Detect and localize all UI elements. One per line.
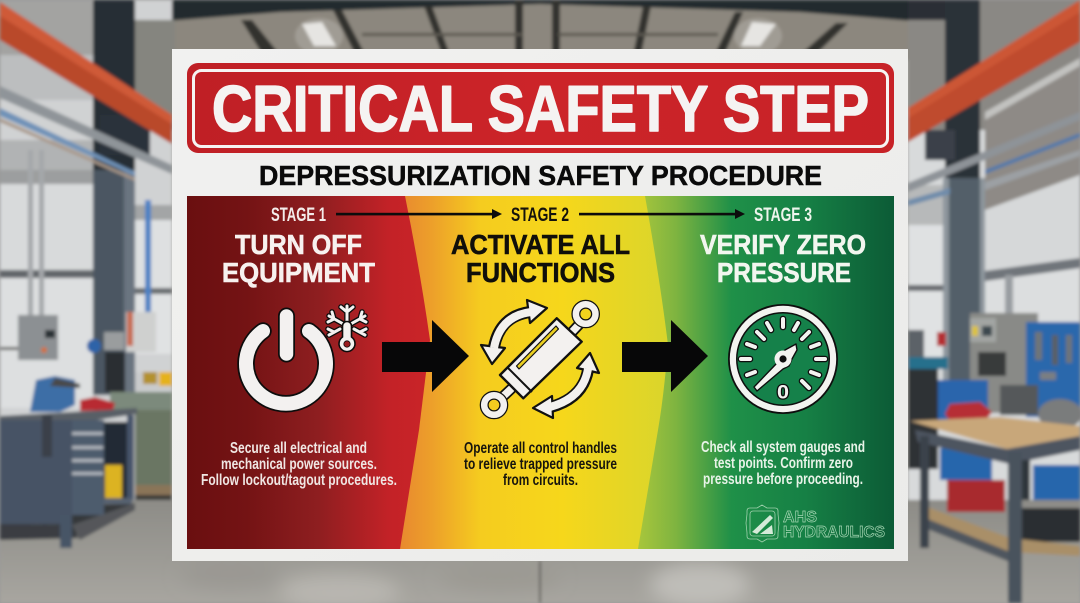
stage 2 description: Operate all control handles bbox=[464, 440, 617, 457]
right equipment bbox=[908, 313, 1080, 469]
panel: stage bands bbox=[187, 196, 894, 549]
stage 3 description: Check all system gauges and bbox=[701, 439, 865, 456]
stage 3 heading: VERIFY ZERO bbox=[700, 229, 866, 260]
left equipment bbox=[0, 312, 172, 500]
right beam bbox=[908, 0, 1080, 142]
stage 1 heading: EQUIPMENT bbox=[222, 257, 375, 288]
arrow: large black arrow 2 bbox=[622, 320, 708, 392]
floor bbox=[0, 500, 1080, 603]
left pipes bbox=[0, 86, 172, 312]
stage 1 description: Secure all electrical and bbox=[230, 440, 367, 457]
panel: stage 1 bbox=[201, 205, 397, 489]
right wall bbox=[908, 0, 1080, 500]
arrow: stage 1 to stage 2 line bbox=[336, 209, 502, 219]
panel: stage 3 bbox=[700, 205, 885, 542]
icon: power symbol bbox=[246, 316, 326, 404]
logo badge bbox=[746, 505, 779, 542]
logo wordmark: HYDRAULICS bbox=[783, 524, 885, 541]
left wall bbox=[0, 0, 175, 510]
right column bbox=[908, 0, 985, 383]
stage 1 heading: TURN OFF bbox=[235, 229, 362, 260]
stage 2 heading: FUNCTIONS bbox=[466, 257, 615, 288]
logo: AHS Hydraulics bbox=[746, 505, 885, 542]
stage 3 heading: PRESSURE bbox=[717, 257, 851, 288]
stage 3 description: pressure before proceeding. bbox=[703, 471, 863, 488]
left beam bbox=[0, 2, 172, 144]
stage 2 label: STAGE 2 bbox=[511, 205, 569, 226]
arrow: stage 2 to stage 3 line bbox=[579, 209, 745, 219]
right bench bbox=[910, 417, 1080, 603]
arrow: large black arrow 1 bbox=[382, 320, 469, 392]
logo wordmark: AHS bbox=[783, 509, 817, 526]
stage 3 description: test points. Confirm zero bbox=[714, 455, 853, 472]
stage 2 heading: ACTIVATE ALL bbox=[451, 229, 630, 260]
title: CRITICAL SAFETY STEP bbox=[212, 72, 869, 145]
stage 1 label: STAGE 1 bbox=[271, 205, 326, 226]
panel: stage 2 bbox=[451, 205, 630, 489]
subtitle: DEPRESSURIZATION SAFETY PROCEDURE bbox=[259, 160, 822, 191]
icon: pressure gauge bbox=[728, 304, 838, 414]
stage 2 description: to relieve trapped pressure bbox=[464, 456, 617, 473]
sign panel bbox=[172, 49, 908, 561]
stage 1 description: Follow lockout/tagout procedures. bbox=[201, 472, 397, 489]
icon: snowflake thermometer bbox=[328, 306, 366, 352]
stage 3 label: STAGE 3 bbox=[754, 205, 812, 226]
left column bbox=[93, 0, 150, 395]
title banner bbox=[187, 63, 894, 153]
ceiling bbox=[130, 0, 950, 60]
stage 2 description: from circuits. bbox=[503, 472, 578, 489]
icon: hydraulic cylinder with rotation arrows bbox=[481, 300, 599, 418]
right pipes bbox=[908, 112, 1080, 206]
gauge zero: 0 bbox=[777, 382, 789, 404]
stage 1 description: mechanical power sources. bbox=[221, 456, 377, 473]
left vise and bench bbox=[0, 376, 137, 548]
